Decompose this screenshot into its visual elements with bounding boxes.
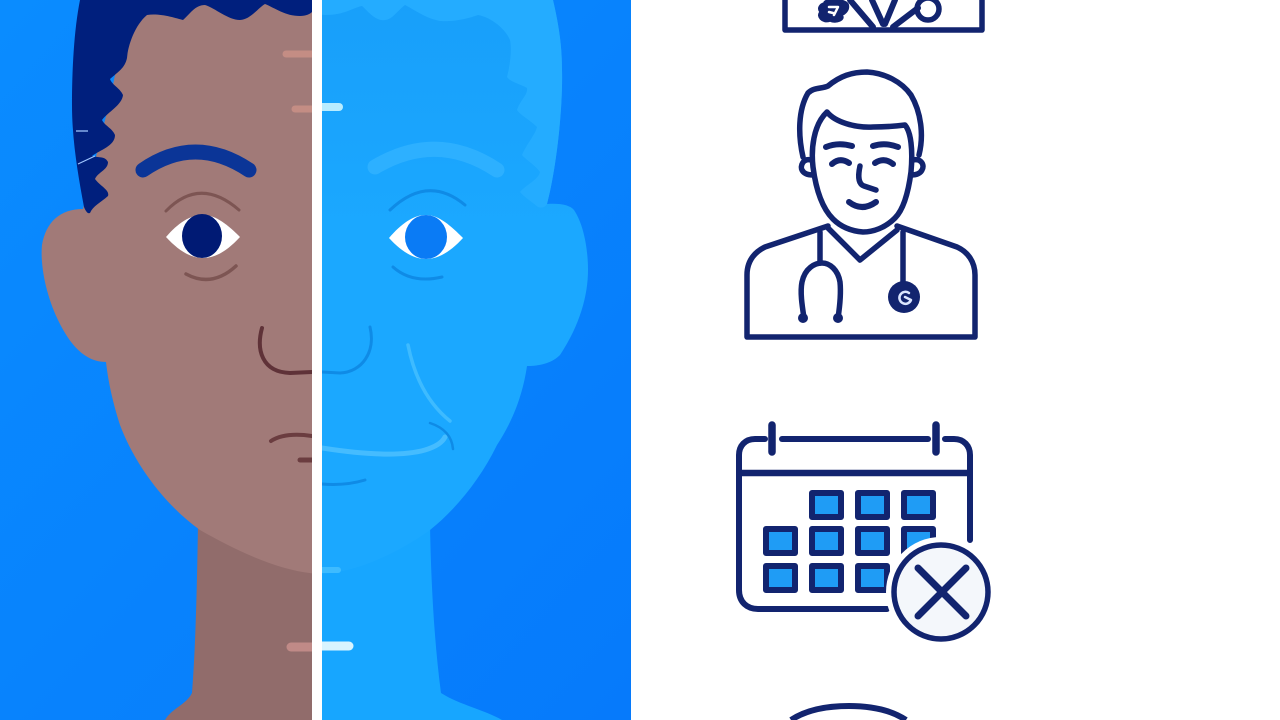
eyebrow, right bbox=[375, 149, 497, 170]
collar bbox=[828, 228, 897, 260]
cancel cross bbox=[918, 568, 966, 616]
mouth corner, right bbox=[430, 423, 453, 449]
neck, left bbox=[165, 525, 320, 720]
icon: doctor with stethoscope bbox=[747, 72, 975, 337]
upper eyelid, left bbox=[166, 193, 239, 211]
lower lip line, left bbox=[300, 458, 312, 462]
flower detail bbox=[829, 7, 838, 15]
under-eye line, right bbox=[393, 267, 442, 279]
icon: calendar with cancel mark bbox=[739, 425, 996, 647]
face shape, left bbox=[42, 0, 320, 574]
neck, right bbox=[315, 525, 502, 720]
hair outline bbox=[800, 72, 921, 157]
stethoscope tube, right bbox=[900, 232, 906, 283]
hair, left bbox=[72, 0, 312, 213]
face outline bbox=[812, 112, 912, 232]
rays bbox=[850, 0, 918, 27]
panel: left half of face, natural skin bbox=[42, 0, 320, 720]
forehead marks, left bbox=[286, 54, 312, 109]
neck mark, left bbox=[291, 642, 312, 652]
pupil, right bbox=[405, 215, 447, 259]
ears bbox=[801, 160, 923, 175]
chin mark, right bbox=[320, 567, 338, 573]
mouth line, left bbox=[271, 435, 312, 441]
hair silhouette, right bbox=[315, 0, 562, 208]
upper eyelid, right bbox=[390, 191, 465, 210]
nose line, right bbox=[322, 327, 371, 373]
mouth bbox=[849, 202, 876, 207]
neck mark, right bbox=[318, 642, 349, 650]
stethoscope tube, left bbox=[817, 232, 823, 263]
mouth line, right bbox=[322, 437, 445, 454]
icon: framed picture, cropped at top bbox=[785, 0, 982, 30]
stethoscope ear tips bbox=[798, 313, 843, 323]
nose line, left bbox=[260, 328, 312, 373]
pupil, left bbox=[182, 214, 222, 258]
eyebrows bbox=[826, 144, 898, 147]
panel: blue background bbox=[0, 0, 631, 720]
lower lip line, right bbox=[322, 480, 365, 484]
face shape, right bbox=[322, 5, 588, 530]
ring bbox=[917, 0, 939, 20]
stethoscope loop bbox=[801, 263, 840, 318]
divider bbox=[312, 0, 322, 720]
calendar frame bbox=[739, 425, 970, 609]
flower bbox=[819, 0, 848, 22]
eye white, left bbox=[166, 215, 240, 258]
hair highlights bbox=[76, 131, 95, 164]
cancel badge bbox=[894, 545, 988, 639]
eyebrow, left bbox=[143, 152, 249, 170]
nose bbox=[859, 166, 876, 190]
cancel badge halo bbox=[886, 537, 996, 647]
panel: right half of face, blue tone bbox=[315, 0, 588, 720]
calendar day cells bbox=[766, 493, 933, 590]
icon: circle, cropped at bottom bbox=[791, 706, 906, 720]
cheek fold, right bbox=[408, 345, 450, 421]
forehead mark, right bbox=[318, 103, 339, 111]
eye white, right bbox=[389, 215, 463, 259]
shoulders and chest bbox=[747, 226, 975, 337]
stethoscope chest piece bbox=[888, 281, 920, 313]
smiling eyes bbox=[832, 160, 893, 164]
chest piece detail bbox=[899, 292, 911, 304]
under-eye line, left bbox=[186, 266, 236, 279]
